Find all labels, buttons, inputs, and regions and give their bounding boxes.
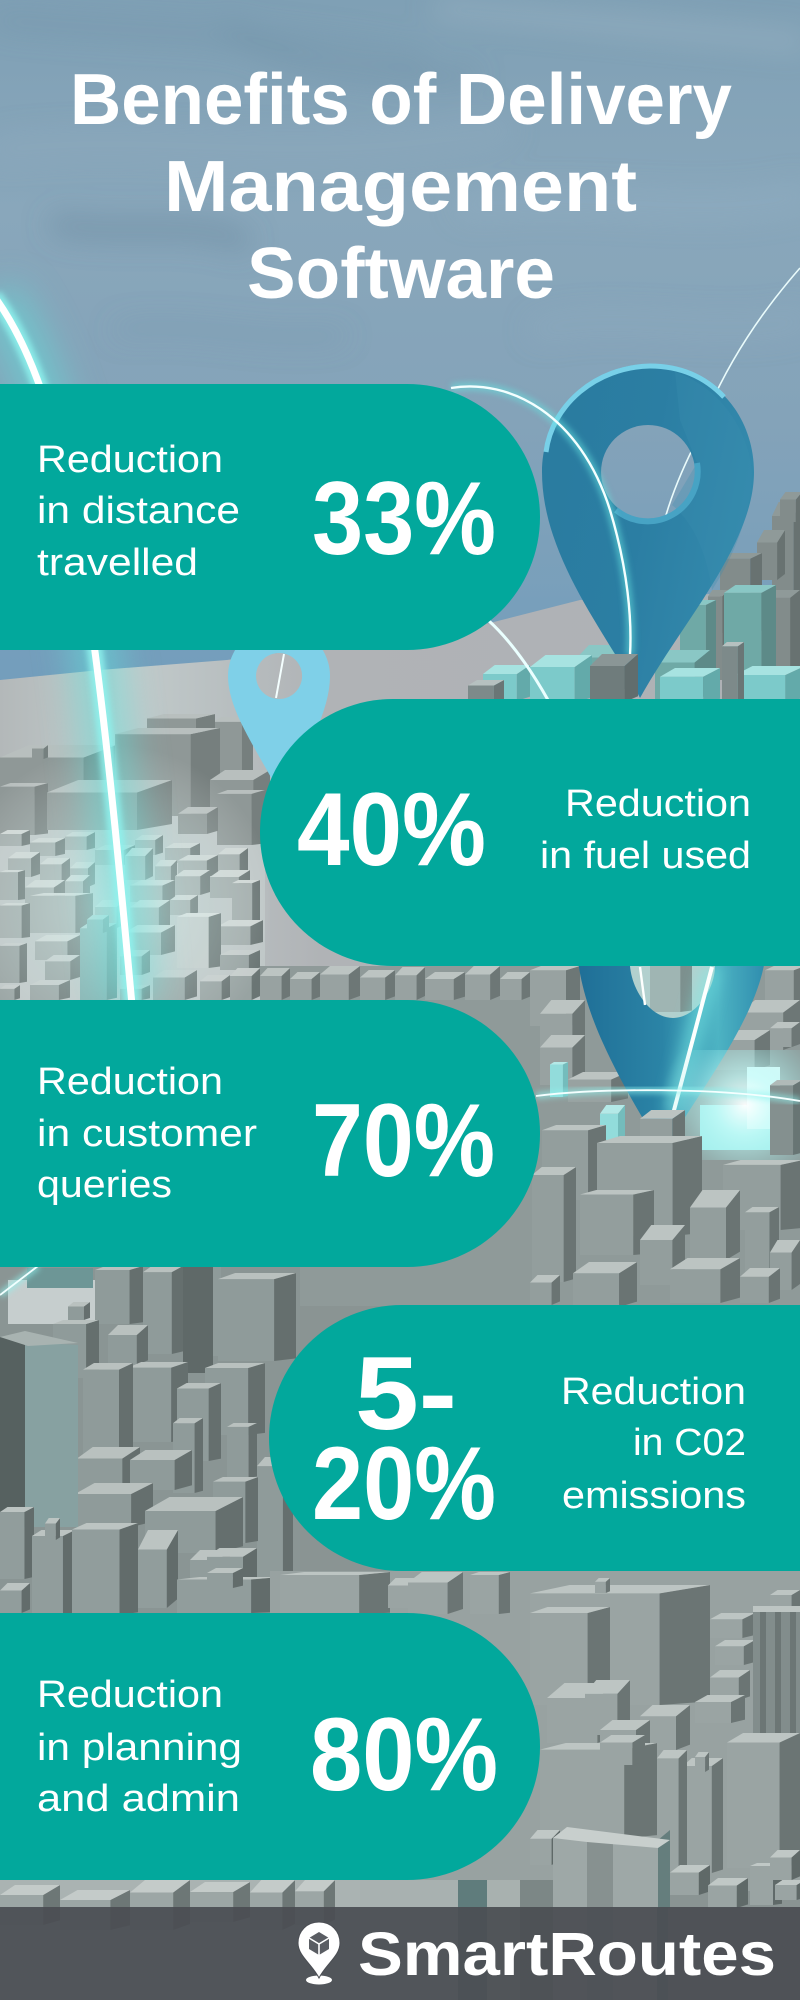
icon: third location pin xyxy=(578,960,765,1152)
label: Reduction xyxy=(561,1371,746,1413)
pale building above the footer xyxy=(553,1827,670,1908)
arc: glowing beam on the left xyxy=(0,296,132,1005)
panel: reduction in planning and admin xyxy=(0,1613,540,1880)
stat: 40%: 40% xyxy=(297,772,486,888)
title: Management xyxy=(164,147,637,227)
city: left district xyxy=(0,700,270,1000)
stat: 5-20%: 20% xyxy=(312,1426,496,1542)
wordmark: SmartRoutes xyxy=(358,1920,776,1988)
panel: reduction in distance travelled xyxy=(0,384,540,650)
label xyxy=(540,783,751,877)
city: lower left district xyxy=(0,1266,300,1616)
label: queries xyxy=(37,1164,172,1206)
city skyline behind the large pin xyxy=(468,492,800,703)
stat: 80%: 80% xyxy=(310,1697,498,1813)
label: Reduction xyxy=(37,439,223,481)
label: in C02 xyxy=(633,1422,746,1464)
label: in planning xyxy=(37,1727,242,1769)
arc: thin line right of the large pin xyxy=(666,268,800,515)
panel: reduction in fuel used xyxy=(260,699,800,966)
city: middle strip and lower right district xyxy=(270,1571,800,1908)
icon: logo pin with parcel xyxy=(298,1922,340,1984)
label xyxy=(561,1371,746,1517)
label: Reduction xyxy=(37,1674,223,1716)
stat: 70%: 70% xyxy=(312,1083,495,1199)
title: Software xyxy=(247,234,555,314)
label: and admin xyxy=(37,1778,240,1820)
stat: 33%: 33% xyxy=(312,461,496,577)
building in front of the large pin xyxy=(590,654,638,702)
arc: bright line across the large pin xyxy=(451,386,630,655)
glowing cyan blocks xyxy=(660,1050,800,1160)
label: emissions xyxy=(562,1475,746,1517)
arc: small glow bottom left xyxy=(0,1266,38,1295)
panel: reduction in customer queries xyxy=(0,1000,540,1267)
third pin hole contents xyxy=(628,930,716,1020)
logo: SmartRoutes xyxy=(298,1920,776,1988)
label: Reduction xyxy=(565,783,751,825)
arc: line crossing the lower skyline xyxy=(488,620,548,700)
label: Reduction xyxy=(37,1061,223,1103)
city: bottom blocks xyxy=(0,1880,668,2000)
arc: horizontal glowing ring xyxy=(536,1090,800,1101)
title xyxy=(70,60,732,314)
icon: large location pin xyxy=(542,364,754,698)
label xyxy=(37,1674,242,1820)
label: travelled xyxy=(37,542,198,584)
icon: small light blue location pin xyxy=(228,625,330,805)
background: sky xyxy=(0,0,800,700)
footer band xyxy=(0,1907,800,2000)
city: strip below the fuel panel and district behind the third pin xyxy=(260,930,800,1306)
label: in customer xyxy=(37,1113,257,1155)
title: Benefits of Delivery xyxy=(70,60,732,140)
panel: reduction in CO2 emissions xyxy=(269,1305,800,1571)
city: right district between panels xyxy=(530,1110,800,1307)
stat: 5-20% xyxy=(312,1336,496,1542)
background: pale ground plane xyxy=(0,590,800,1010)
label xyxy=(37,439,240,584)
label: in distance xyxy=(37,490,240,532)
stat: 5-20%: 5- xyxy=(355,1336,457,1452)
label xyxy=(37,1061,257,1206)
label: in fuel used xyxy=(540,835,751,877)
arc: beam across the third pin xyxy=(640,967,712,1114)
